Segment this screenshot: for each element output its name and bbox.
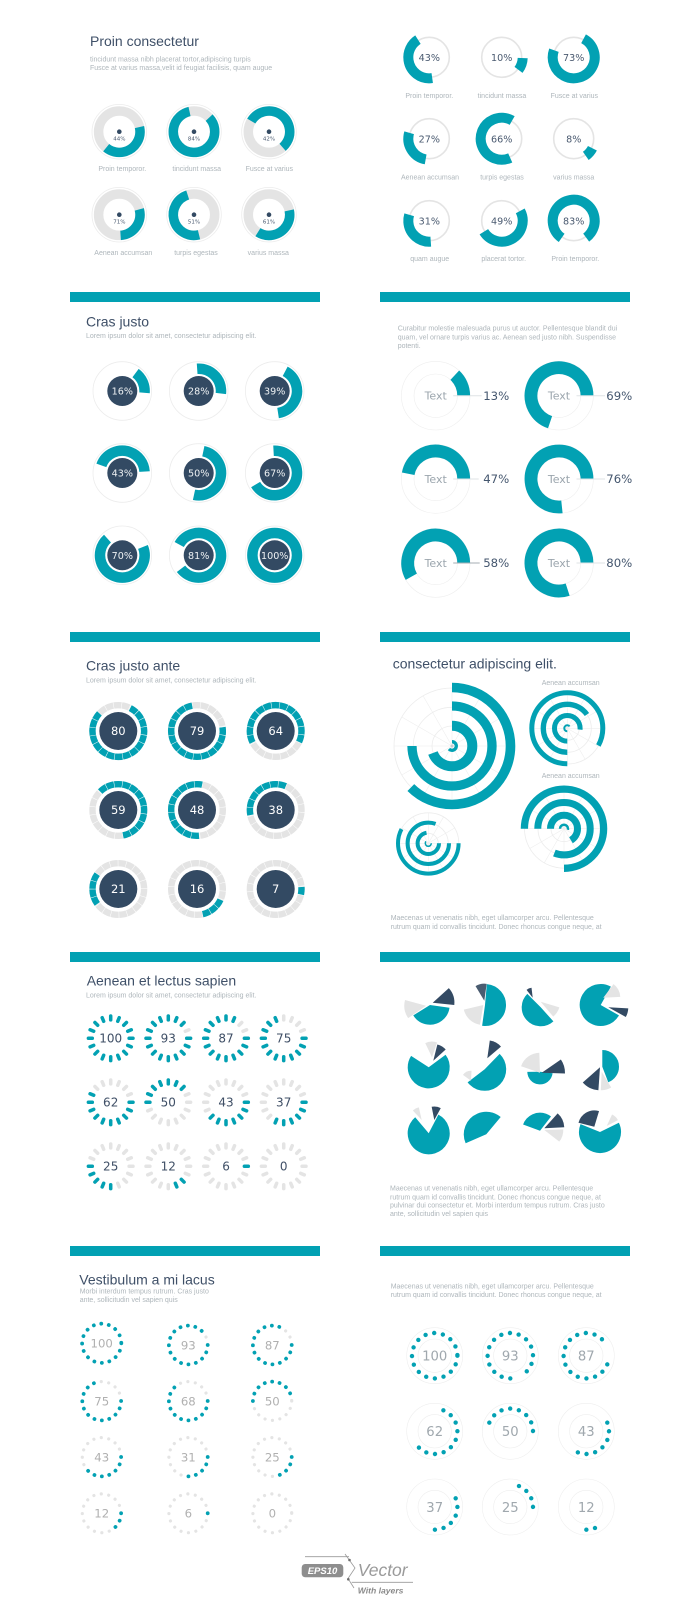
caption: Aenean accumsan [542,680,600,687]
gauge 50% [169,444,228,502]
segmented gauge 16: 16 [190,882,204,896]
footnote text: Maecenas ut venenatis nibh, eget ullamcorper arcu. Pellentesque [391,915,594,922]
radial chart bottom right [524,789,604,868]
dot gauge 12 [82,1494,121,1533]
gauge 100%: 100% [261,551,288,562]
donut 31% [407,198,452,243]
ringed dot gauge 93: 93 [502,1349,519,1364]
gauge 50%: 50% [188,469,209,480]
heading: Aenean et lectus sapien [87,973,236,989]
donut 84%: 84% [188,136,200,142]
gauge 39% [245,361,305,421]
pie chart row 2 no. 1 [414,1047,443,1082]
gauge 76% [525,445,632,513]
intro text: Curabitur molestie malesuada purus ut auctor. Pellentesque blandit dui [398,326,618,333]
ringed dot gauge 12 [557,1477,616,1537]
body text: pulvinar dui consectetur et. Morbi interdum tempus rutrum. Cras justo [390,1203,605,1210]
donut captions: Fusce at varius [551,93,599,100]
panel: Aenean et lectus sapien [86,973,306,1189]
donut 8% [545,110,602,167]
dot gauge 68 [169,1382,208,1420]
panel: exploded pie charts [390,986,619,1218]
subheading: Morbi interdum tempus rutrum. Cras justo [80,1289,209,1296]
tick gauge 87 [204,1016,248,1061]
tick gauge 6: 6 [222,1160,230,1174]
dot gauge 0 [253,1494,292,1533]
donut 8%: 8% [566,134,581,145]
body text: Maecenas ut venenatis nibh, eget ullamcorper arcu. Pellentesque [390,1186,593,1193]
gauge 16% [91,360,153,422]
donut captions: Proin temporor. [405,93,453,100]
pie chart row 3 no. 3 [528,1114,558,1142]
tick gauge 43: 43 [218,1096,234,1110]
tick gauge 12 [146,1144,191,1189]
gauge 69%: Text [547,390,571,403]
donut 10%: 10% [491,53,512,64]
subheading: Lorem ipsum dolor sit amet, consectetur adipiscing elit. [86,677,256,684]
donut 49% [473,192,530,249]
pie chart row 3 no. 4 [584,1117,615,1146]
segmented gauge 59 [82,774,155,846]
ringed dot gauge 37 [405,1477,464,1537]
pie chart row 1 no. 2 [472,989,496,1017]
gauge 43%: 43% [112,469,133,480]
dot gauge 93: 93 [181,1338,196,1352]
gauge 70% [93,526,152,585]
donut captions: turpis egestas [480,174,524,182]
dot gauge 87: 87 [265,1338,280,1352]
gauge 58%: Text [424,557,448,570]
dot gauge 25: 25 [265,1450,280,1464]
footnote text [391,915,602,931]
gauge 69% [524,360,632,431]
tick gauge 87: 87 [218,1032,234,1046]
gauge 13% [396,356,509,435]
donut captions: quam augue [410,256,449,263]
donut captions: varius massa [248,250,289,257]
segmented gauge 38: 38 [268,803,283,817]
donut 43%: 43% [419,53,440,64]
gauge 47% [401,445,509,513]
pie chart row 1 no. 3 [526,990,554,1021]
gauge 80%: Text [547,557,571,570]
ringed dot gauge 87 [557,1326,616,1385]
dot gauge 31: 31 [181,1450,196,1464]
tick gauge 100: 100 [99,1032,122,1046]
body text: ante, sollicitudin vel sapien quis [390,1211,489,1218]
gauge 81%: 81% [188,551,209,562]
gauge 76%: Text [547,473,571,486]
intro text [391,1283,602,1299]
gauge 43% [93,444,152,502]
donut 31%: 31% [419,216,440,227]
tick gauge 50 [146,1080,191,1125]
section divider bars [70,292,630,1256]
dot gauge 6 [169,1494,208,1533]
donut 61%: 61% [263,219,275,225]
segmented gauge 16 [163,855,231,923]
dot gauge 100 [82,1324,121,1363]
gauge 58%: 58% [483,556,509,570]
segmented gauge 64 [241,696,310,766]
donut captions: tincidunt massa [172,166,221,173]
gauge 13%: 13% [483,389,509,403]
tick gauge 0: 0 [280,1160,288,1174]
dot gauge 0: 0 [269,1507,276,1521]
donut captions: Aenean accumsan [94,250,152,257]
ringed dot gauge 43 [557,1402,616,1461]
ringed dot gauge 62: 62 [426,1425,443,1440]
gauge 80% [524,528,632,598]
segmented gauge 59: 59 [111,803,126,817]
panel: consectetur adipiscing elit radial charts [391,655,604,931]
donut 73%: 73% [563,53,584,64]
body text: rutrum quam id convallis tincidunt. Donec rhoncus congue neque, at [390,1194,601,1201]
ringed dot gauge 50 [481,1402,540,1461]
donut 61% [242,187,296,242]
donut 42% [241,103,297,160]
body text [390,1186,605,1218]
radial chart top right [532,693,603,764]
intro text: potenti. [398,343,421,350]
pie chart row 2 no. 2 [464,1048,500,1088]
tick gauge 100 [88,1016,133,1061]
subheading: ante, sollicitudin vel sapien quis [80,1297,178,1304]
footer logo: EPS10 Vector With layers [302,1554,413,1595]
panel: Vestibulum a mi lacus [79,1271,292,1533]
intro text [398,326,618,350]
ringed dot gauge 62 [405,1402,464,1461]
donut captions: Proin temporor. [98,166,146,173]
gauge 47%: Text [424,473,448,486]
gauge 28%: 28% [188,387,209,398]
donut captions: Fusce at varius [246,166,294,173]
panel: ringed dot gauges [391,1283,616,1537]
donut 71%: 71% [113,219,125,225]
panel: Text gauges [396,326,632,601]
segmented gauge 38 [245,779,306,841]
donut 66% [474,111,529,166]
radial chart large [394,688,510,804]
donut captions [94,166,294,257]
dot gauge 25 [253,1438,292,1476]
gauge 81% [168,525,229,586]
segmented gauge 79: 79 [190,724,204,738]
donut 44% [92,104,147,159]
donut captions: placerat tortor. [481,256,526,263]
pie chart row 1 no. 4 [586,986,619,1019]
ringed dot gauge 93 [482,1328,538,1384]
radial chart bottom left [398,813,459,874]
segmented gauge 21 [82,853,154,925]
segmented gauge 64: 64 [268,724,283,738]
heading: Proin consectetur [90,33,199,49]
segmented gauge 21: 21 [111,882,126,896]
donut captions: tincidunt massa [478,93,526,100]
donut 10% [480,36,523,79]
donut 71% [92,187,147,242]
dot gauge 31 [169,1438,208,1476]
gauge 67%: 67% [264,469,285,480]
subheading: Lorem ipsum dolor sit amet, consectetur adipiscing elit. [86,993,256,1000]
pie chart row 2 no. 4 [588,1055,614,1084]
segmented gauge 80 [84,696,153,766]
donut 66%: 66% [491,134,512,145]
tick gauge 37 [261,1080,306,1125]
gauge 80%: 80% [606,556,632,570]
tick gauge 50: 50 [161,1096,176,1110]
segmented gauge 48: 48 [190,803,204,817]
intro text [90,56,272,72]
panel: Proin consectetur [90,33,297,257]
ringed dot gauge 37: 37 [426,1501,443,1516]
ringed dot gauge 25: 25 [502,1501,519,1516]
donut 83%: 83% [563,216,584,227]
dot gauge 43 [82,1438,121,1476]
tick gauge 25: 25 [103,1160,118,1174]
pie chart row 3 no. 1 [413,1111,443,1147]
gauge 28% [169,362,228,420]
subheading [80,1289,209,1304]
tick gauge 75 [261,1016,306,1061]
tick gauge 25 [88,1144,133,1189]
panel: Cras justo [86,314,305,586]
intro text: tincidunt massa nibh placerat tortor,adipiscing turpis [90,56,251,64]
tick gauge 75: 75 [276,1032,291,1046]
footer logo: EPS10 Vector With layers: Vector [358,1560,409,1580]
tick gauge 62 [88,1080,133,1125]
donut 42%: 42% [263,136,275,142]
pie chart row 2 no. 3 [525,1056,558,1089]
ringed dot gauge 87: 87 [578,1349,595,1364]
heading: Vestibulum a mi lacus [79,1271,215,1287]
dot gauge 50: 50 [265,1394,280,1408]
subheading: Lorem ipsum dolor sit amet, consectetur adipiscing elit. [86,333,256,340]
dot gauge 100: 100 [91,1337,113,1351]
dot gauge 68: 68 [181,1394,196,1408]
panel: Cras justo ante [82,658,310,925]
intro text: Maecenas ut venenatis nibh, eget ullamcorper arcu. Pellentesque [391,1283,594,1290]
footer logo: EPS10 Vector With layers: EPS10 [308,1566,338,1577]
ringed dot gauge 100: 100 [422,1349,447,1364]
gauge 13%: Text [424,390,448,403]
ringed dot gauge 25 [481,1477,540,1537]
gauge 67% [245,444,304,502]
heading: Cras justo ante [86,658,180,674]
tick gauge 62: 62 [103,1096,118,1110]
ringed dot gauge 50: 50 [502,1425,519,1440]
dot gauge 75 [82,1382,121,1420]
dot gauge 50 [253,1382,292,1420]
intro text: rutrum quam id convallis tincidunt. Donec rhoncus congue neque, at [391,1292,602,1299]
tick gauge 12: 12 [161,1160,176,1174]
dot gauge 6: 6 [185,1507,192,1521]
donut 27%: 27% [419,134,440,145]
ringed dot gauge 100 [407,1328,463,1384]
tick gauge 0 [261,1144,306,1189]
ringed dot gauge 12: 12 [578,1501,595,1516]
ringed dot gauge 43: 43 [578,1425,595,1440]
dot gauge 87 [253,1326,292,1364]
tick gauge 37: 37 [276,1096,291,1110]
panel: nine thin-ring donuts [401,29,603,263]
donut 43% [406,34,453,81]
donut 84% [165,102,223,161]
donut captions: Aenean accumsan [401,174,459,182]
donut captions: turpis egestas [174,250,218,257]
caption: Aenean accumsan [542,773,600,780]
segmented gauge 7: 7 [272,882,279,896]
gauge 70%: 70% [112,551,133,562]
intro text: Fusce at varius massa,velit id feugiat facilisis, quam augue [90,65,272,72]
donut 73% [545,29,602,86]
dot gauge 75: 75 [94,1394,109,1408]
gauge 69%: 69% [606,389,632,403]
segmented gauge 7 [248,861,304,917]
donut captions: Proin temporor. [551,256,599,263]
pie chart row 1 no. 1 [411,987,448,1021]
donut 51% [167,187,221,242]
gauge 39%: 39% [264,387,285,398]
footnote text: rutrum quam id convallis tincidunt. Donec rhoncus congue neque, at [391,924,602,931]
intro text: quam, vel ornare turpis varius ac. Aenean sed justo nibh. Suspendisse [398,334,616,342]
gauge 47%: 47% [483,472,509,486]
footer logo: EPS10 Vector With layers: With layers [358,1585,404,1595]
donut 49%: 49% [491,216,512,227]
tick gauge 6 [204,1144,248,1189]
donut 44%: 44% [113,136,125,142]
gauge 58% [398,525,509,601]
tick gauge 43 [204,1080,248,1125]
gauge 76%: 76% [606,472,632,486]
donut captions: varius massa [553,174,594,182]
tick gauge 93: 93 [161,1032,176,1046]
dot gauge 12: 12 [94,1507,109,1521]
segmented gauge 80: 80 [111,724,126,738]
donut 83% [544,191,603,250]
heading: Cras justo [86,314,149,330]
dot gauge 93 [169,1326,208,1364]
pie chart row 3 no. 2 [472,1120,501,1149]
segmented gauge 79 [167,701,227,761]
gauge 100% [245,526,304,585]
gauge 16%: 16% [112,387,133,398]
donut captions [401,93,599,263]
donut 27% [405,114,454,163]
segmented gauge 48 [169,782,225,838]
heading: consectetur adipiscing elit. [393,655,557,671]
donut 51%: 51% [188,219,200,225]
dot gauge 43: 43 [94,1450,109,1464]
tick gauge 93 [146,1016,191,1061]
